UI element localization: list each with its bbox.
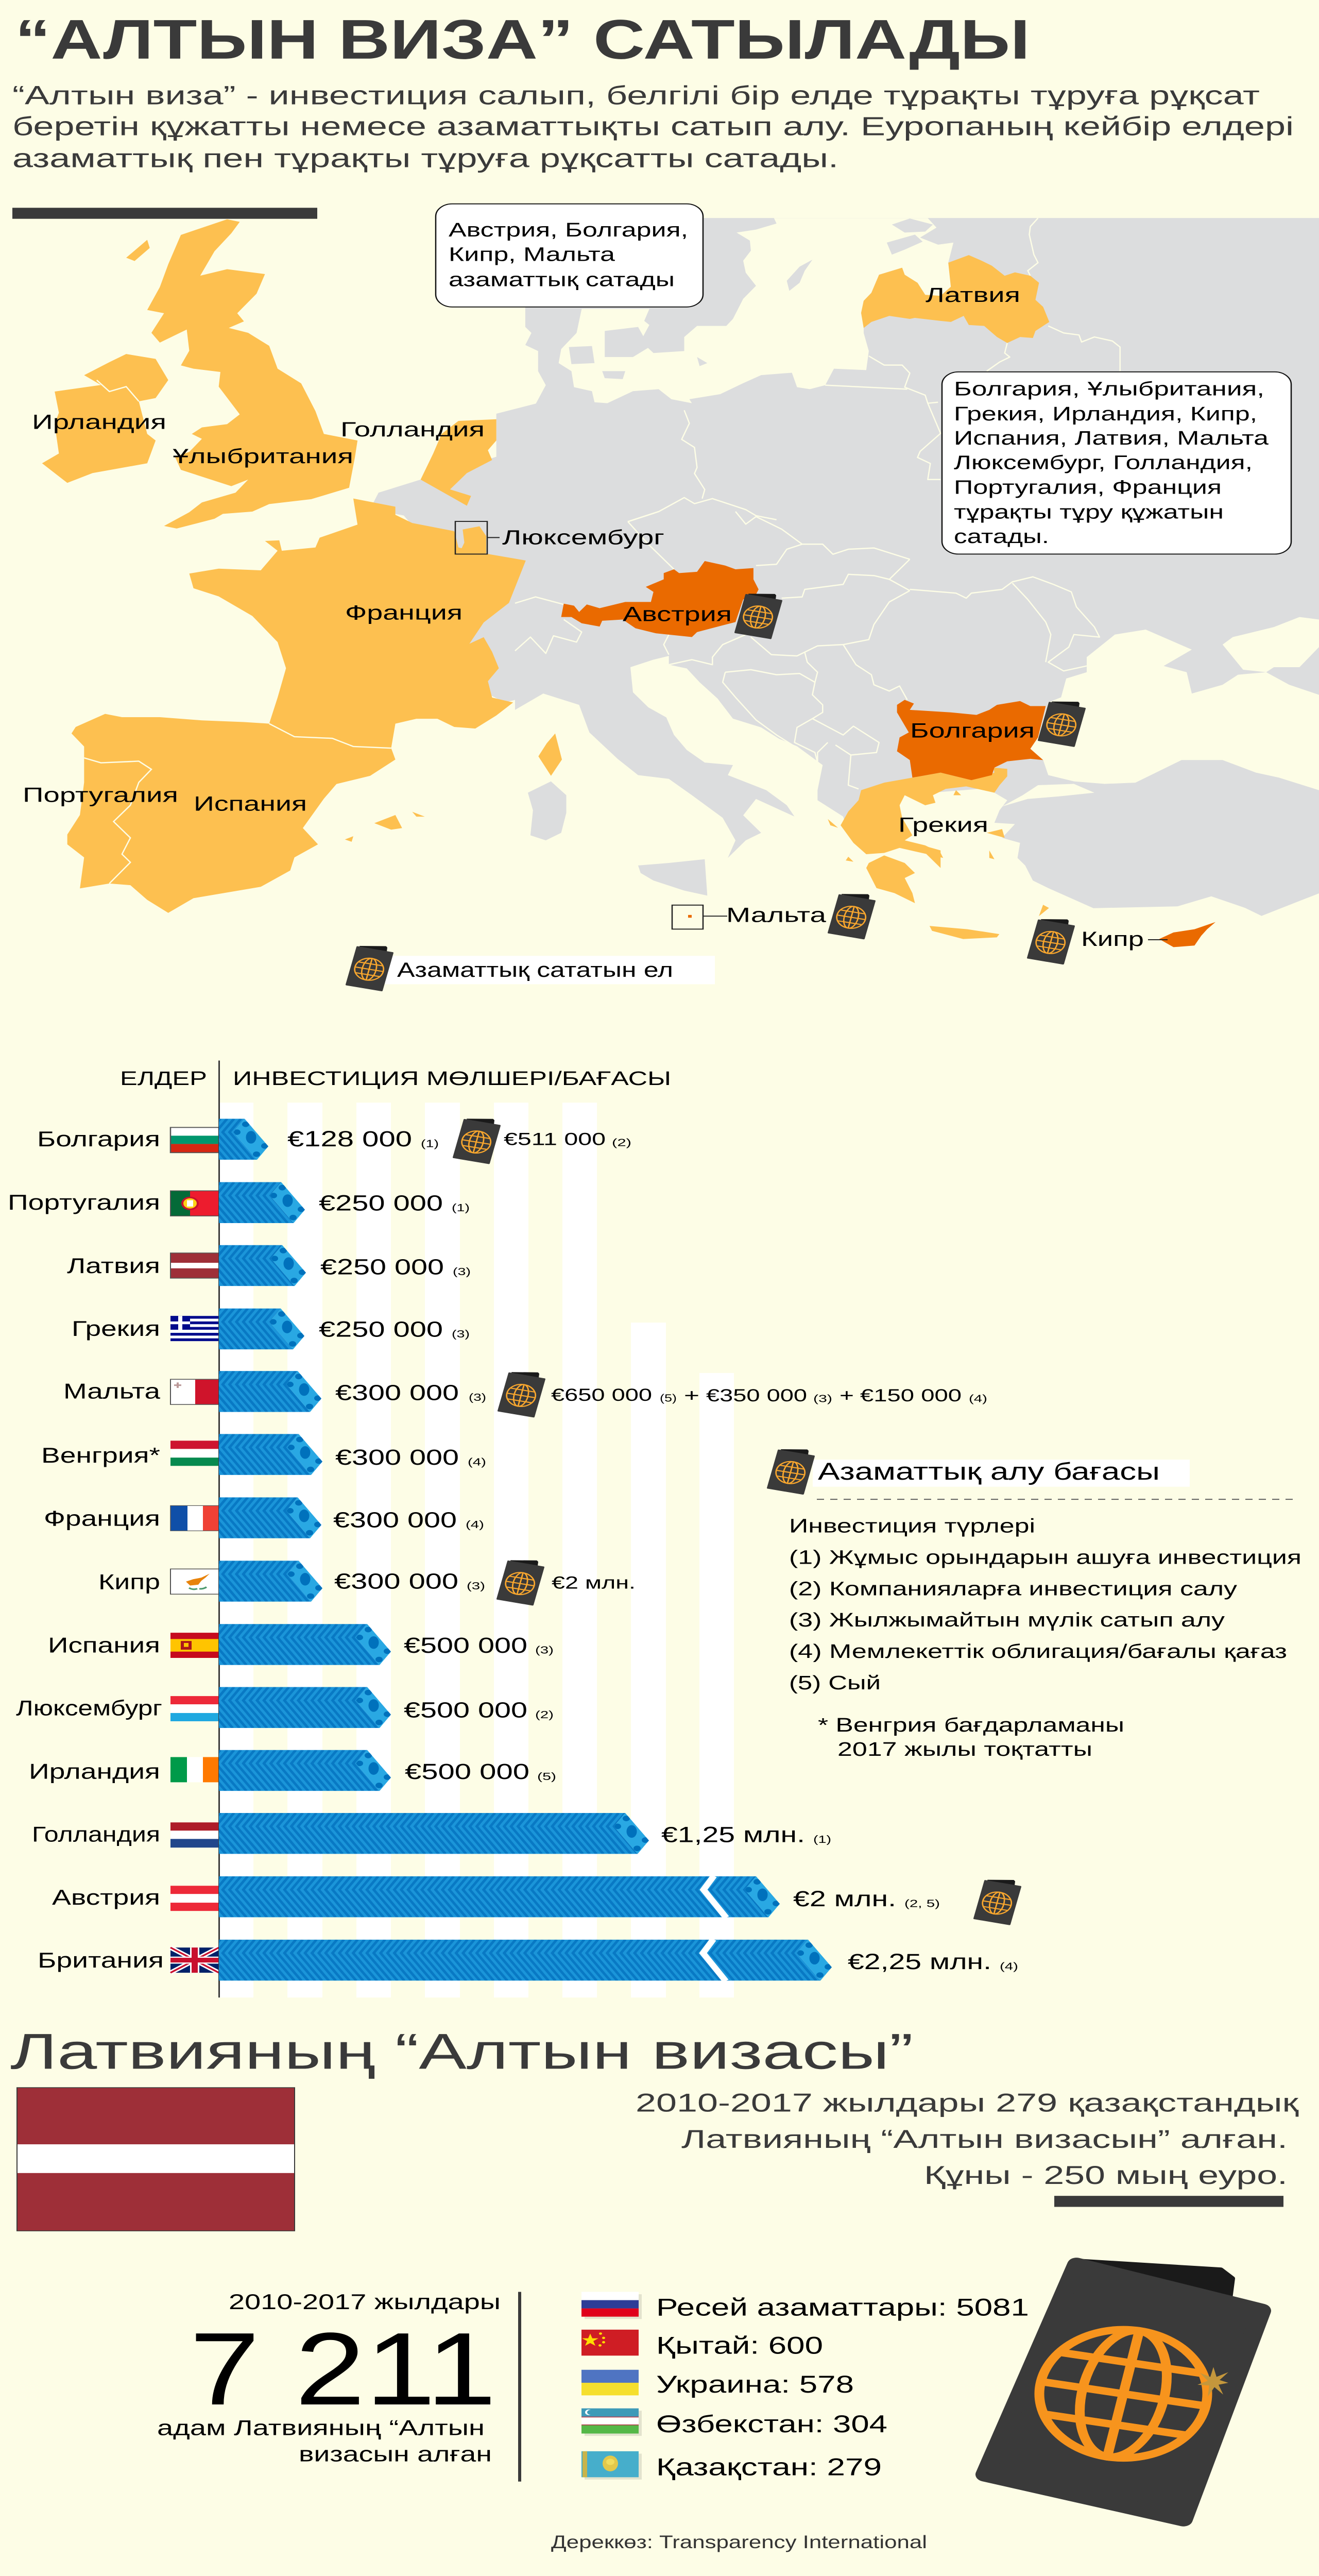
bar: Cyprus (219, 1561, 322, 1602)
map legend (347, 946, 715, 991)
bar: Austria (219, 1876, 780, 1918)
chart citizenship prices: + (684, 1386, 699, 1405)
chart investment type footnote markers: (4) (468, 1456, 486, 1468)
summary underline bar (1054, 2196, 1283, 2207)
Scottish islands (126, 240, 150, 261)
flag: United Kingdom (170, 1947, 219, 1973)
chart values: €250 000 (320, 1255, 444, 1279)
country names (8, 1127, 164, 1973)
country names: Грекия (72, 1317, 160, 1341)
callout: residence sellers: сатады. (954, 526, 1049, 548)
label: Cyprus connector (1148, 939, 1168, 940)
chart investment type footnote markers: (4) (1000, 1961, 1018, 1973)
chart column headers: ИНВЕСТИЦИЯ МӨЛШЕРІ/БАҒАСЫ (233, 1067, 671, 1089)
callout: citizenship sellers: Кипр, Мальта (449, 244, 615, 265)
text: Latvia summary: Латвияның “Алтын визасын” алған. (681, 2125, 1288, 2154)
Corsica and Balearic islands (345, 734, 1049, 939)
country names: Кипр (98, 1570, 160, 1594)
legend list: (1) Жұмыс орындарын ашуға инвестиция (789, 1547, 1301, 1568)
country border lines (515, 218, 1120, 789)
inner borders on light orange countries (84, 380, 391, 884)
map country labels: Мальта (726, 904, 826, 926)
France (189, 499, 526, 748)
chart values: €500 000 (404, 1633, 527, 1658)
chart values: €500 000 (404, 1698, 527, 1722)
callout: residence sellers: Болгария, Ұлыбритания, (954, 378, 1264, 400)
citizens list: Қазақстан: 279 (656, 2453, 882, 2481)
bar: Hungary (219, 1434, 322, 1475)
country names: Португалия (8, 1191, 160, 1214)
legend list: (4) Мемлекеттік облигация/бағалы қағаз (789, 1641, 1287, 1663)
Malta inset (672, 905, 727, 929)
chart investment type footnote markers: (2) (535, 1709, 554, 1721)
stat: total 7 211: 7 211 (190, 2312, 496, 2427)
chart investment type footnote markers: (5) (660, 1393, 677, 1404)
flag: Spain (170, 1633, 219, 1658)
Great Britain (147, 219, 357, 529)
map country labels: Австрия (623, 602, 732, 625)
icon: passport Austria (735, 594, 781, 638)
chart values: €1,25 млн. (661, 1822, 805, 1847)
chart values: €250 000 (319, 1317, 443, 1342)
chart citizenship prices: €650 000 (551, 1385, 652, 1405)
flag: Austria (170, 1886, 219, 1911)
text: Latvia summary: 2010-2017 жылдары 279 қазақстандық (636, 2089, 1298, 2117)
chart investment type footnote markers: (3) (813, 1393, 832, 1405)
chart values: €500 000 (405, 1759, 529, 1784)
callout: residence sellers: Люксембург, Голландия, (954, 452, 1253, 473)
header bar (12, 208, 317, 219)
country names: Испания (48, 1633, 160, 1657)
legend: investment types (768, 1450, 1301, 1760)
flag: France (170, 1505, 219, 1531)
intro text: азаматтық пен тұрақты тұруға рұқсатты сатады. (12, 143, 838, 173)
callout: citizenship sellers: Австрия, Болгария, (449, 219, 688, 241)
country names: Австрия (52, 1886, 160, 1909)
bar: France (219, 1497, 321, 1538)
chart investment type footnote markers: (3) (452, 1328, 470, 1340)
chart investment type footnote markers: (4) (969, 1393, 987, 1405)
country names: Мальта (63, 1380, 161, 1403)
citizens list: Өзбекстан: 304 (656, 2410, 887, 2438)
country names: Люксембург (16, 1697, 162, 1720)
bar: Malta (219, 1371, 321, 1412)
callout: residence sellers: Грекия, Ирландия, Кипр, (954, 403, 1257, 425)
bar: Bulgaria (219, 1119, 268, 1160)
flag: Cyprus (170, 1569, 219, 1594)
map legend: Азаматтық сататын ел (397, 958, 673, 981)
map country labels: Голландия (340, 418, 485, 441)
map country labels: Латвия (926, 283, 1020, 306)
chart values: €2 млн. (793, 1886, 896, 1911)
flag: Latvia (170, 1253, 219, 1278)
flag: Netherlands (170, 1822, 219, 1848)
callout: residence sellers: Испания, Латвия, Мальта (954, 428, 1269, 449)
flag: Greece (170, 1316, 219, 1341)
country names: Болгария (37, 1127, 160, 1151)
flag: Luxembourg (170, 1696, 219, 1721)
stat divider (518, 2292, 521, 2482)
countries selling residence: light orange (42, 219, 1049, 939)
country names: Венгрия* (41, 1444, 160, 1468)
map country labels: Грекия (898, 814, 988, 836)
Netherlands (421, 419, 496, 506)
flag: Malta (170, 1379, 219, 1404)
chart values: €300 000 (335, 1380, 459, 1405)
legend list: Инвестиция түрлері (789, 1515, 1035, 1537)
icon: passport chart Malta (499, 1372, 544, 1417)
chart values: €300 000 (334, 1569, 458, 1594)
flag: Latvia large (17, 2088, 295, 2231)
map country labels: Ирландия (32, 411, 166, 433)
stat: total 7 211 (157, 2291, 501, 2466)
chart investment type footnote markers: (3) (467, 1580, 485, 1592)
country names: Британия (38, 1948, 164, 1973)
stat: total 7 211: визасын алған (299, 2443, 492, 2466)
chart values: €300 000 (335, 1445, 459, 1469)
Luxembourg inset (455, 521, 500, 554)
callout: citizenship sellers (436, 204, 703, 307)
legend list: * Венгрия бағдарламаны (818, 1714, 1124, 1736)
map of Europe (42, 218, 1319, 1114)
chart values: €300 000 (333, 1507, 457, 1532)
text: Latvia summary (636, 2089, 1298, 2190)
heading: Latvia golden visa: Латвияның “Алтын визасы” (10, 2024, 913, 2080)
Greece (828, 768, 1007, 903)
bar: Netherlands (219, 1813, 649, 1854)
legend list: (5) Сый (789, 1672, 881, 1694)
chart citizenship prices: €511 000 (504, 1130, 606, 1149)
callout: residence sellers (942, 372, 1291, 554)
source: Дереккөз: Transparency International (551, 2532, 927, 2552)
callout: residence sellers: тұрақты тұру құжатын (954, 501, 1224, 523)
flag: Kazakhstan (581, 2451, 642, 2480)
icon: big passport (985, 2261, 1262, 2519)
icon: passport Malta (829, 894, 875, 939)
chart investment type footnote markers: (2, 5) (904, 1897, 940, 1910)
Austria (561, 561, 759, 637)
citizens list: Ресей азаматтары: 5081 (656, 2293, 1029, 2321)
legend list (789, 1515, 1301, 1760)
chart investment type footnote markers: (4) (466, 1519, 484, 1531)
legend list: 2017 жылы тоқтатты (837, 1739, 1092, 1760)
flag: Bulgaria (170, 1127, 219, 1153)
chart citizenship prices (504, 1130, 962, 1592)
Latvia (861, 255, 1049, 343)
bar: Portugal (219, 1182, 305, 1223)
chart investment type footnote markers: (1) (421, 1138, 439, 1150)
citizens list: Қытай: 600 (656, 2332, 823, 2359)
chart investment type footnote markers: (3) (453, 1266, 471, 1278)
chart values (287, 1126, 991, 1974)
land: grey mainland (515, 218, 1319, 944)
text: Latvia summary: Құны - 250 мың еуро. (924, 2161, 1288, 2190)
country names: Голландия (32, 1823, 160, 1846)
chart values: €2,25 млн. (848, 1950, 991, 1974)
map country labels: Кипр (1081, 927, 1144, 951)
icon: passport chart Cyprus (498, 1561, 543, 1605)
map country labels: Ұлыбритания (173, 445, 353, 468)
chart citizenship prices: €150 000 (860, 1386, 962, 1405)
chart citizenship prices: €350 000 (706, 1386, 807, 1405)
chart investment type footnote markers: (3) (535, 1645, 554, 1656)
icon: passport chart Austria (974, 1880, 1020, 1924)
flag: China (581, 2330, 639, 2355)
icon: passport chart Bulgaria (454, 1119, 500, 1163)
chart investment type footnote markers: (1) (813, 1834, 831, 1845)
map country labels: Болгария (910, 719, 1035, 742)
flag: Portugal (170, 1191, 219, 1216)
citizens list: Украина: 578 (656, 2370, 854, 2398)
chart citizenship prices: + (840, 1386, 854, 1405)
chart investment type footnote markers: (1) (452, 1202, 470, 1214)
map country labels: Португалия (23, 784, 178, 806)
citizens list (656, 2293, 1029, 2481)
chart column headers: ЕЛДЕР (120, 1067, 207, 1089)
map country labels: Испания (194, 792, 307, 815)
map country labels: Франция (345, 601, 462, 624)
intro text: “Алтын виза” - инвестиция салып, белгілі бір елде тұрақты тұруға рұқсат (12, 80, 1260, 110)
stat: total 7 211: 2010-2017 жылдары (229, 2291, 501, 2314)
stat: total 7 211: адам Латвияның “Алтын (157, 2416, 485, 2440)
bar: Latvia (219, 1245, 306, 1286)
chart citizenship prices: €2 млн. (552, 1573, 636, 1592)
flag: Uzbekistan (581, 2409, 642, 2436)
intro text: беретін құжатты немесе азаматтықты сатып алу. Еуропаның кейбір елдері (12, 111, 1294, 141)
flag: Russia (581, 2292, 642, 2319)
Cyprus (1159, 922, 1215, 947)
title: “АЛТЫН ВИЗА” САТЫЛАДЫ (15, 8, 1030, 71)
legend heading: Азаматтық алу бағасы (818, 1458, 1160, 1485)
bar: Ireland (219, 1750, 391, 1791)
chart column stripes (219, 1103, 734, 1997)
bar: Greece (219, 1309, 304, 1349)
chart investment type footnote markers: (3) (469, 1392, 486, 1403)
map country labels (23, 283, 1144, 951)
legend list: (3) Жылжымайтын мүлік сатып алу (789, 1609, 1225, 1631)
legend list: (2) Компанияларға инвестиция салу (789, 1578, 1238, 1600)
flag: Hungary (170, 1440, 219, 1466)
countries selling citizenship: dark orange (561, 561, 1215, 947)
callout: citizenship sellers: азаматтық сатады (449, 269, 675, 291)
chart investment type footnote markers: (2) (612, 1137, 631, 1148)
chart investment type footnote markers (421, 1137, 1018, 1973)
legend heading (768, 1450, 1190, 1494)
Spain and Portugal (67, 714, 396, 913)
label: Luxembourg: Люксембург (502, 526, 664, 549)
seas (515, 218, 1319, 1114)
land: grey western part and islands (370, 218, 933, 895)
flag: Ukraine (581, 2370, 639, 2395)
country names: Франция (44, 1506, 160, 1531)
icon: passport Bulgaria (1039, 702, 1085, 746)
chart axis (218, 1061, 220, 1997)
bar: Spain (219, 1624, 391, 1665)
country names: Ирландия (29, 1760, 160, 1784)
intro text (12, 80, 1294, 173)
bar: Luxembourg (219, 1687, 391, 1728)
flag: Ireland (170, 1757, 219, 1782)
chart investment type footnote markers: (5) (537, 1771, 556, 1783)
Ireland (42, 354, 168, 483)
callout: residence sellers: Португалия, Франция (954, 477, 1222, 498)
bar: United Kingdom (219, 1939, 832, 1981)
icon: passport Cyprus (1028, 920, 1074, 964)
chart values: €128 000 (287, 1126, 412, 1151)
Bulgaria (897, 700, 1046, 780)
country names: Латвия (67, 1254, 160, 1278)
chart values: €250 000 (319, 1191, 443, 1215)
